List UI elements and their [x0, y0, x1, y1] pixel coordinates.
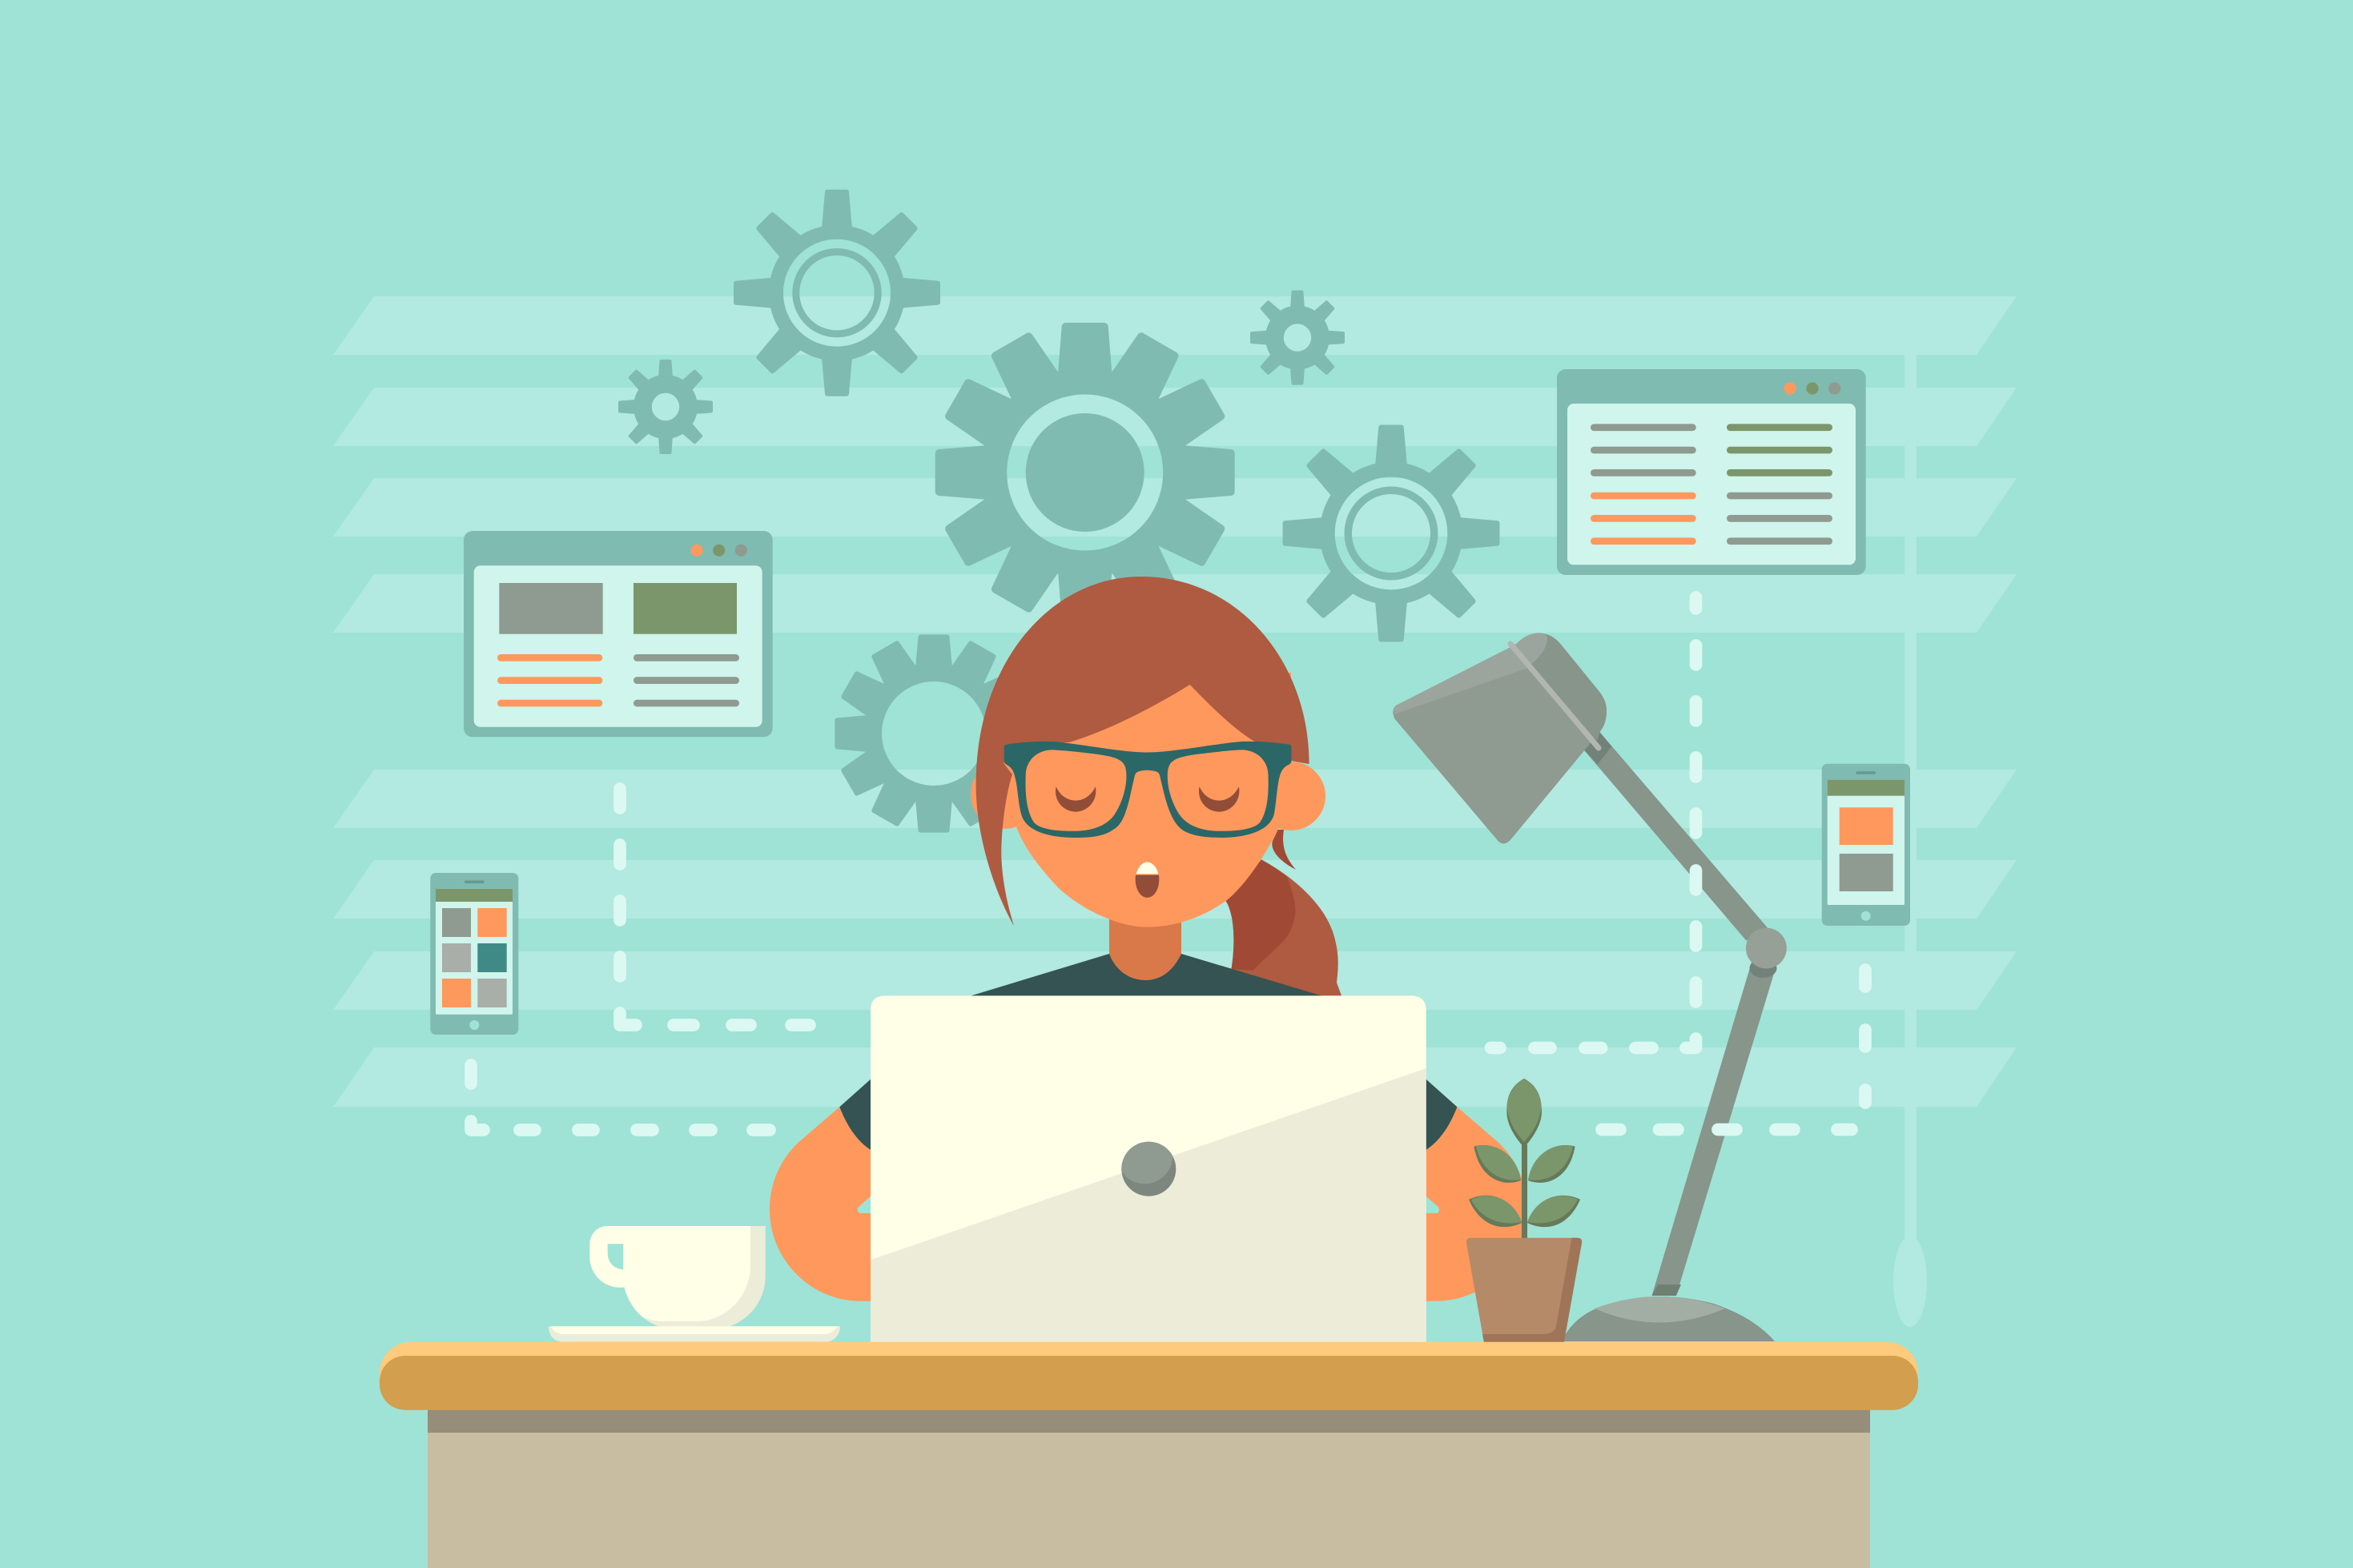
gear: right ring gear	[1285, 428, 1497, 639]
illustration: woman working at laptop	[333, 189, 2017, 1568]
desk body	[428, 1410, 1870, 1568]
glasses	[1004, 742, 1291, 838]
right arm	[1420, 1073, 1527, 1301]
desk top	[380, 1342, 1918, 1410]
neck	[1109, 905, 1181, 980]
left arm	[770, 1073, 877, 1301]
phone: left, tile grid	[430, 873, 518, 1035]
gear: small left	[620, 361, 711, 452]
saucer	[549, 1326, 840, 1342]
hair	[976, 577, 1309, 926]
ponytail	[1225, 830, 1341, 995]
potted plant	[1466, 1079, 1582, 1342]
gear: lower left behind head	[837, 637, 1031, 830]
shirt	[971, 954, 1321, 1009]
browser window: left	[464, 531, 773, 737]
eye: right, closed	[1199, 786, 1239, 812]
window blinds	[333, 296, 2017, 1327]
lamp	[1393, 633, 1787, 1341]
dashed connector lines	[471, 597, 1865, 1130]
gear: top left ring gear	[736, 192, 938, 394]
phone: right, two blocks	[1822, 764, 1910, 926]
gear: large centre	[939, 327, 1231, 618]
mouth	[1136, 862, 1159, 898]
browser window: right	[1557, 369, 1866, 575]
eye: left, closed	[1056, 786, 1096, 812]
face	[1005, 673, 1291, 927]
gear: small right	[1252, 292, 1343, 384]
coffee cup	[589, 1226, 766, 1327]
laptop	[871, 995, 1426, 1345]
ears	[971, 760, 1325, 830]
